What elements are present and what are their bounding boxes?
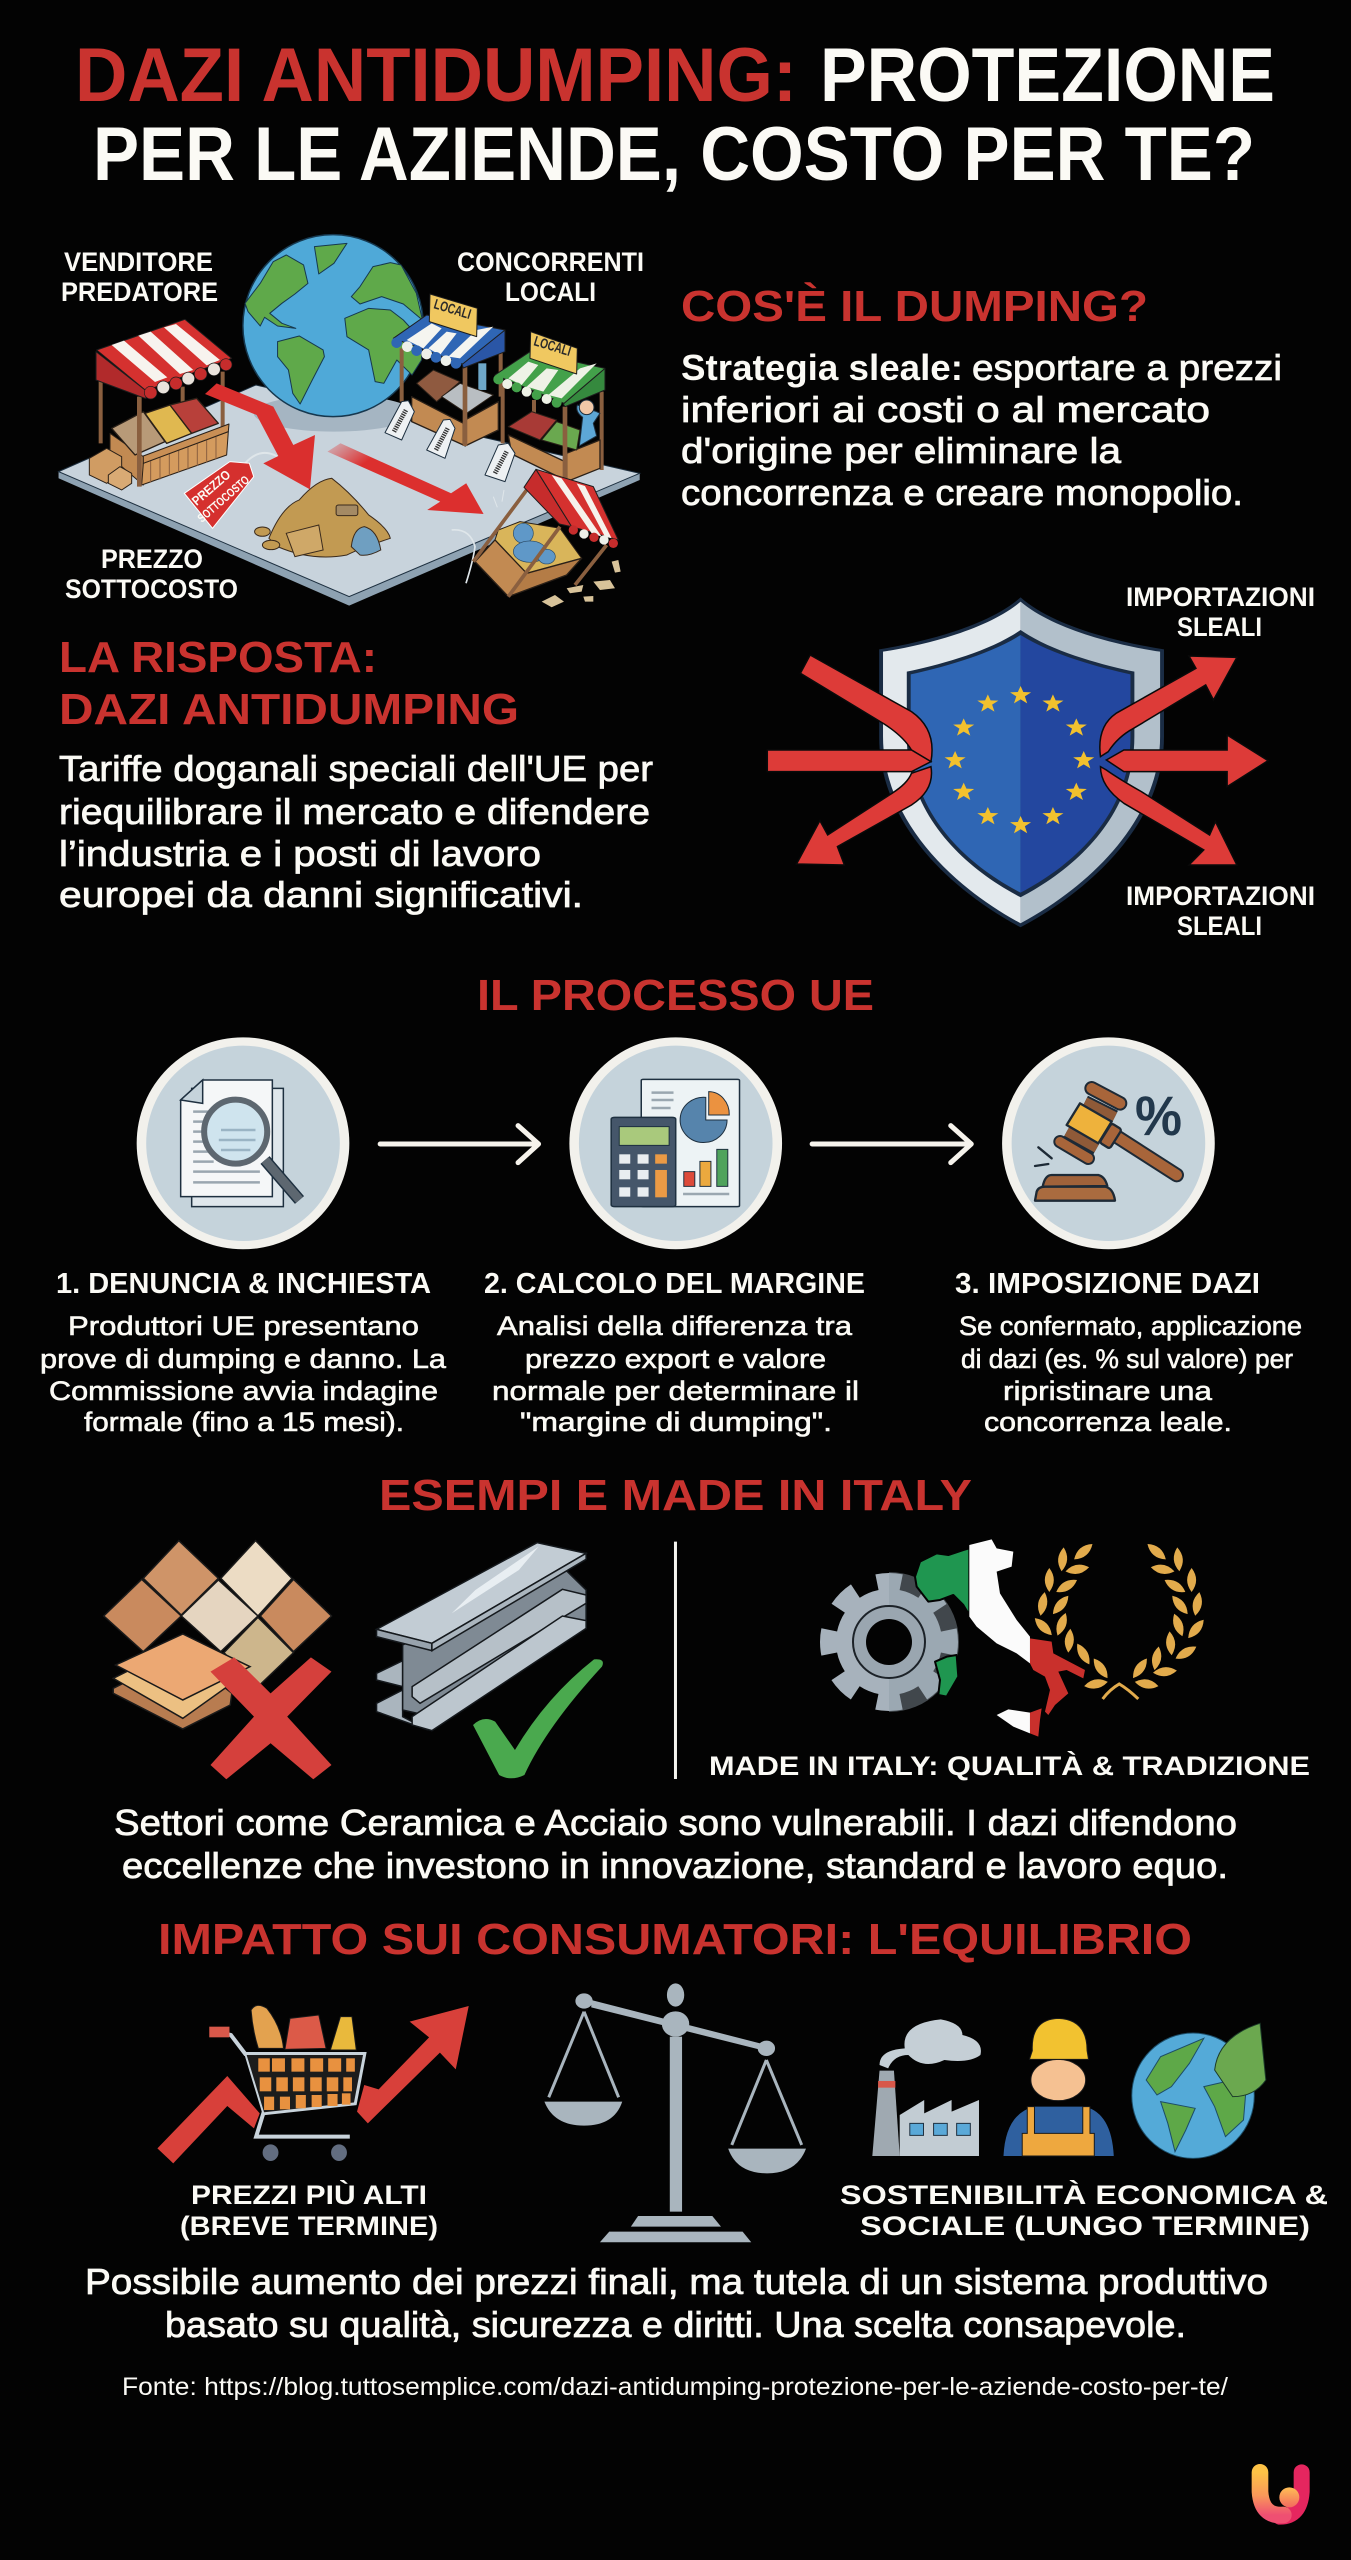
process icons row bbox=[137, 1037, 1215, 1249]
icon: balance scale bbox=[544, 1983, 806, 2242]
step 3 text: di dazi (es. % sul valore) per bbox=[961, 1344, 1293, 1374]
label: importazioni sleali bottom: IMPORTAZIONI bbox=[1126, 881, 1315, 911]
logo bbox=[1260, 2472, 1302, 2517]
arrows: deflected left bbox=[767, 655, 932, 865]
label: importazioni sleali top: IMPORTAZIONI bbox=[1126, 582, 1315, 612]
icon: earth and leaf bbox=[1132, 2023, 1266, 2158]
step 1 text: prove di dumping e danno. La bbox=[40, 1344, 447, 1374]
label: venditore predatore bbox=[61, 247, 218, 307]
price tags: local bbox=[385, 401, 515, 482]
label: sostenibilità bbox=[840, 2179, 1328, 2241]
icon: italy map bbox=[915, 1539, 1085, 1737]
text: la risposta bbox=[59, 748, 653, 915]
icon: worker bbox=[1003, 2018, 1114, 2156]
collapsed stall bbox=[452, 469, 621, 607]
text: dumping definition: concorrenza e creare monopolio. bbox=[681, 472, 1243, 513]
circle: gavel background bbox=[1002, 1037, 1215, 1249]
illustration: EU shield with deflected arrows bbox=[767, 597, 1268, 927]
step 1 text: Produttori UE presentano bbox=[68, 1311, 419, 1341]
heading: il processo UE: IL PROCESSO UE bbox=[477, 971, 874, 1020]
arrows: deflected right bbox=[1100, 656, 1268, 865]
icon: document and magnifier bbox=[137, 1037, 349, 1249]
icon: calculator and charts bbox=[569, 1037, 782, 1249]
step 2 text: Analisi della differenza tra bbox=[497, 1311, 853, 1341]
step 3 text bbox=[955, 1268, 1302, 1437]
label: concorrenti locali: CONCORRENTI bbox=[457, 247, 644, 277]
arrow: effect on local competitors bbox=[327, 443, 484, 514]
stalls: local competitors and collapsed stall bbox=[385, 294, 621, 607]
percent symbol: % bbox=[1135, 1084, 1182, 1147]
label: prezzi più alti: (BREVE TERMINE) bbox=[180, 2211, 438, 2241]
tag label: prezzo sottocosto: PREZZO bbox=[189, 467, 233, 508]
text: la risposta: europei da danni significativi. bbox=[59, 874, 583, 915]
label: importazioni sleali bottom: SLEALI bbox=[1177, 911, 1262, 941]
step 3 text: 3. IMPOSIZIONE DAZI bbox=[955, 1268, 1260, 1300]
shield bbox=[879, 597, 1164, 927]
label: concorrenti locali bbox=[457, 247, 644, 307]
heading: la risposta bbox=[59, 633, 519, 734]
label: importazioni sleali bottom bbox=[1126, 881, 1315, 941]
text: conclusion: Possibile aumento dei prezzi finali, ma tutela di un sistema produttivo bbox=[85, 2261, 1268, 2302]
label: concorrenti locali: LOCALI bbox=[505, 277, 596, 307]
tag label: prezzo sottocosto: SOTTOCOSTO bbox=[195, 473, 252, 525]
step 3 text: concorrenza leale. bbox=[984, 1407, 1232, 1437]
title: PROTEZIONE bbox=[820, 33, 1275, 118]
arrow: step 1 to 2 bbox=[380, 1126, 539, 1163]
arrow: step 2 to 3 bbox=[812, 1126, 971, 1163]
illustrations: sectors bbox=[104, 1541, 675, 1779]
heading: impatto sui consumatori: IMPATTO SUI CONSUMATORI: L'EQUILIBRIO bbox=[158, 1915, 1192, 1964]
tag shape: prezzo sottocosto bbox=[184, 453, 278, 528]
icon: globe bbox=[243, 235, 423, 417]
title: PER LE AZIENDE, COSTO PER TE? bbox=[93, 112, 1255, 197]
source line: Fonte: https://blog.tuttosemplice.com/dazi-antidumping-protezione-per-le-aziende-costo-per-te/ bbox=[122, 2373, 1228, 2401]
text: sectors: Settori come Ceramica e Acciaio sono vulnerabili. I dazi difendono bbox=[114, 1802, 1237, 1843]
sign label: locali blue: LOCALI bbox=[432, 296, 473, 322]
tag label: prezzo sottocosto bbox=[189, 467, 252, 525]
divider bbox=[674, 1542, 677, 1779]
heading: la risposta: DAZI ANTIDUMPING bbox=[59, 685, 519, 734]
platform bbox=[59, 385, 640, 606]
icon: factory bbox=[872, 2019, 981, 2156]
text: sectors bbox=[114, 1802, 1237, 1886]
title bbox=[75, 33, 1275, 197]
step 1 text: formale (fino a 15 mesi). bbox=[84, 1407, 404, 1437]
text: dumping definition: d'origine per eliminare la bbox=[681, 430, 1122, 471]
text: conclusion: basato su qualità, sicurezza e diritti. Una scelta consapevole. bbox=[165, 2304, 1186, 2345]
icon: gear bbox=[829, 1572, 959, 1712]
arrow: price drop bbox=[205, 383, 315, 489]
label: prezzo sottocosto: SOTTOCOSTO bbox=[65, 574, 238, 604]
step 2 text: normale per determinare il bbox=[492, 1376, 859, 1406]
label: importazioni sleali top bbox=[1126, 582, 1315, 642]
icon: gavel bbox=[1035, 1088, 1177, 1201]
label: prezzo sottocosto bbox=[65, 544, 238, 604]
illustrations: consumer impact bbox=[157, 1983, 1266, 2242]
label: prezzo sottocosto: PREZZO bbox=[101, 544, 203, 574]
text: la risposta: Tariffe doganali speciali dell'UE per bbox=[59, 748, 653, 789]
text: sectors: eccellenze che investono in innovazione, standard e lavoro equo. bbox=[122, 1845, 1228, 1886]
step 2 text: "margine di dumping". bbox=[520, 1407, 832, 1437]
stall: local green bbox=[493, 332, 605, 482]
sign label: locali green: LOCALI bbox=[532, 333, 573, 359]
step 2 text: prezzo export e valore bbox=[525, 1344, 826, 1374]
text: conclusion bbox=[85, 2261, 1268, 2345]
text: la risposta: l’industria e i posti di lavoro bbox=[59, 833, 541, 874]
heading: cos'è il dumping: COS'È IL DUMPING? bbox=[681, 281, 1148, 331]
label: sostenibilità: SOCIALE (LUNGO TERMINE) bbox=[860, 2211, 1310, 2241]
step 3 text: ripristinare una bbox=[1003, 1376, 1213, 1406]
arrow: rising prices bbox=[157, 2006, 469, 2163]
label: prezzi più alti bbox=[180, 2179, 438, 2241]
label: venditore predatore: PREDATORE bbox=[61, 277, 218, 307]
text: dumping definition: Strategia sleale: bbox=[681, 347, 963, 388]
icon: steel beams bbox=[377, 1543, 586, 1731]
step 3 text: Se confermato, applicazione bbox=[959, 1311, 1302, 1341]
step 2 text bbox=[484, 1268, 865, 1437]
step 2 text: 2. CALCOLO DEL MARGINE bbox=[484, 1268, 865, 1300]
heading: la risposta: LA RISPOSTA: bbox=[59, 633, 377, 682]
label: made in Italy: MADE IN ITALY: QUALITÀ & TRADIZIONE bbox=[709, 1750, 1310, 1781]
text: dumping definition bbox=[681, 347, 1282, 513]
icon: red cross bbox=[210, 1657, 331, 1779]
text: dumping definition: inferiori ai costi o al mercato bbox=[681, 389, 1210, 430]
heap of rubble bbox=[255, 478, 390, 557]
heading: esempi e made in Italy: ESEMPI E MADE IN ITALY bbox=[379, 1471, 972, 1520]
icon: ceramic tiles bbox=[104, 1541, 331, 1729]
EU stars bbox=[945, 686, 1094, 833]
illustration: platform and globe bbox=[59, 235, 640, 606]
stall: local blue bbox=[391, 294, 505, 446]
stall: predator seller bbox=[89, 319, 232, 490]
label: prezzi più alti: PREZZI PIÙ ALTI bbox=[191, 2179, 427, 2210]
text: la risposta: riequilibrare il mercato e difendere bbox=[59, 791, 650, 832]
text: dumping definition: esportare a prezzi bbox=[972, 347, 1282, 388]
icon: shopping cart bbox=[209, 2005, 364, 2161]
step 1 text bbox=[40, 1268, 447, 1437]
label: sostenibilità: SOSTENIBILITÀ ECONOMICA & bbox=[840, 2179, 1328, 2210]
icon: laurel wreath bbox=[1032, 1541, 1207, 1699]
icon: green check bbox=[473, 1659, 603, 1778]
title: DAZI ANTIDUMPING: bbox=[75, 33, 797, 118]
label: importazioni sleali top: SLEALI bbox=[1177, 612, 1262, 642]
step 1 text: Commissione avvia indagine bbox=[49, 1376, 438, 1406]
label: venditore predatore: VENDITORE bbox=[64, 247, 213, 277]
step 1 text: 1. DENUNCIA & INCHIESTA bbox=[56, 1268, 431, 1300]
